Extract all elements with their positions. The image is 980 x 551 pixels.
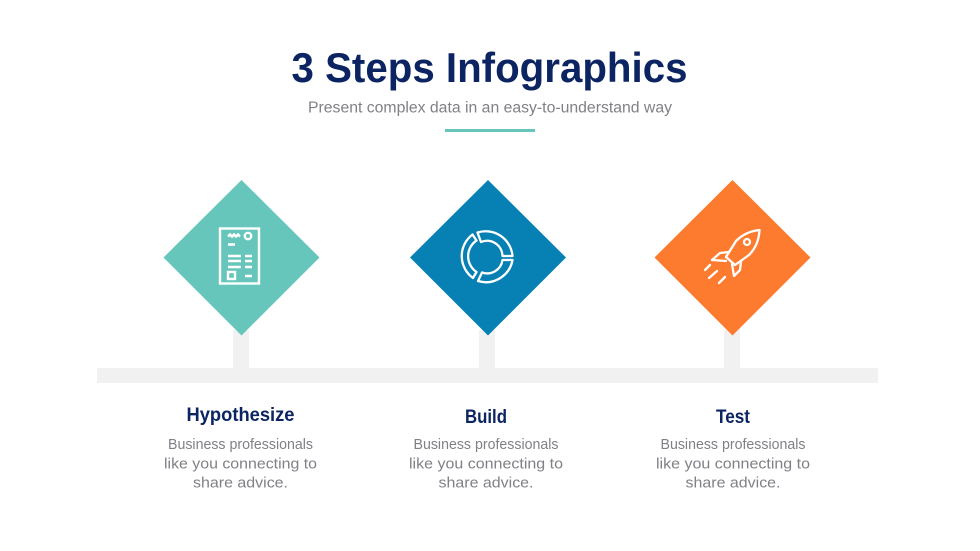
title underline <box>445 129 535 132</box>
title: 3 Steps Infographics <box>292 44 688 91</box>
icon: document <box>220 228 259 284</box>
step 2 text <box>409 407 563 492</box>
timeline <box>97 330 878 383</box>
step 2 text: Business professionals <box>414 436 558 453</box>
step 3 text: like you connecting to <box>656 456 810 472</box>
step 1 text: Business professionals <box>168 436 313 453</box>
subtitle: Present complex data in an easy-to-understand way <box>308 100 672 116</box>
step 2 text: like you connecting to <box>409 456 563 472</box>
step 3 text <box>656 407 810 492</box>
step 3 text: Test <box>716 407 751 428</box>
step 2 text: Build <box>465 407 507 428</box>
step 1 text: Hypothesize <box>186 405 294 426</box>
step 3 text: Business professionals <box>660 436 806 453</box>
step 3 diamond <box>654 180 810 336</box>
step 1 text <box>164 405 317 492</box>
step 3 text: share advice. <box>686 474 780 492</box>
step 2 text: share advice. <box>438 474 534 492</box>
step 1 diamond <box>164 180 320 336</box>
icon: donut chart <box>462 231 512 282</box>
step 1 text: share advice. <box>193 474 288 492</box>
step 2 diamond <box>410 180 566 336</box>
step 1 text: like you connecting to <box>164 456 317 472</box>
icon: rocket <box>705 230 760 283</box>
